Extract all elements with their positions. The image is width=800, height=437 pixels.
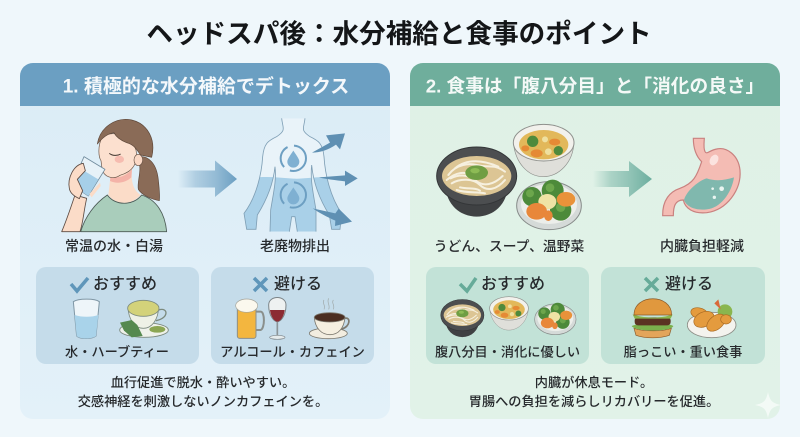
note: hydration: 血行促進で脱水・酔いやすい。 [111,375,295,390]
heading: avoid: 避ける [665,275,713,293]
label: reduced organ load: 内臓負担軽減 [660,238,744,254]
icon: sparkle [755,392,781,418]
icon: herbal tea [120,300,168,337]
card: recommended meals [426,267,589,364]
label: water and herbal tea: 水・ハーブティー [65,344,169,360]
panel: hydration [20,63,390,419]
card: recommended drinks [36,267,199,364]
heading: avoid: 避ける [274,275,322,293]
label: moderate, easy to digest: 腹八分目・消化に優しい [435,344,580,360]
icon: fried shrimp [687,299,736,338]
note: meals: 胃腸への負担を減らしリカバリーを促進。 [469,393,719,409]
arrow: food to stomach [593,161,652,197]
illustration: udon, soup and vegetables [437,124,581,230]
panel 2 header: 2. 食事は「腹八分目」と「消化の良さ」 [426,76,764,96]
panel: meals [410,63,780,419]
heading: recommended: おすすめ [93,275,157,293]
icon: check [460,278,476,291]
label: alcohol and caffeine: アルコール・カフェイン [220,344,365,360]
illustration: stomach [663,138,740,216]
title: ヘッドスパ後：水分補給と食事のポイント [146,19,652,49]
note: hydration: 交感神経を刺激しないノンカフェインを。 [78,393,328,409]
icon: beer and wine [236,297,286,339]
icon: check [71,278,88,291]
illustration: body with detox arrows [240,117,358,233]
panel 1 header [20,63,390,106]
panel 1 header: 1. 積極的な水分補給でデトックス [63,74,349,98]
icon: small bowls [441,297,576,337]
icon: cross [254,278,267,291]
heading: recommended: おすすめ [481,275,545,293]
icon: glass of water [73,299,99,338]
card: drinks to avoid [211,267,374,364]
label: water: 常温の水・白湯 [65,238,163,254]
card: meals to avoid [601,267,765,364]
icon: cross [645,278,658,291]
label: greasy, heavy meals: 脂っこい・重い食事 [624,344,742,360]
note: meals: 内臓が休息モード。 [535,374,653,390]
icon: coffee [309,298,349,339]
panel 2 header [410,63,780,106]
icon: hamburger [632,299,673,338]
illustration: woman drinking water [62,119,167,232]
label: udon, soup, warm vegetables: うどん、スープ、温野菜 [434,239,584,254]
label: waste removal: 老廃物排出 [260,238,330,254]
arrow: hydration to detox [178,160,237,197]
